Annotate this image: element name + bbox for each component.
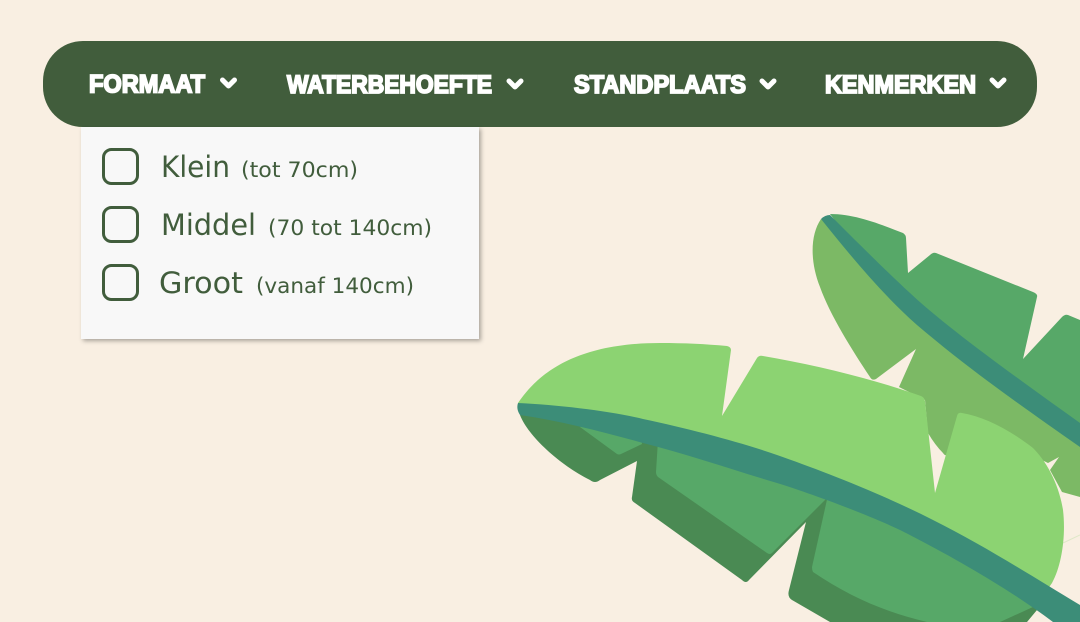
front leaf rib xyxy=(517,403,1080,622)
front leaf mid-green segment 3 xyxy=(812,495,1040,622)
faint stem line xyxy=(1063,535,1080,543)
menu item: Standplaats: STANDPLAATS xyxy=(574,71,746,99)
option: Klein: Klein xyxy=(161,150,230,184)
option: Middel: Middel xyxy=(161,208,256,242)
option: Klein xyxy=(104,150,358,184)
menu item: Waterbehoefte: WATERBEHOEFTE xyxy=(287,71,492,99)
front leaf shaded underside xyxy=(520,415,1037,622)
menu item: Kenmerken: KENMERKEN xyxy=(825,71,976,99)
option: Groot xyxy=(104,266,414,300)
front leaf upper blade xyxy=(518,343,1064,600)
chevron xyxy=(509,81,521,87)
front leaf mid-green segment 1 xyxy=(580,420,642,454)
illustration: front banana leaf xyxy=(517,343,1080,622)
rear leaf rib xyxy=(821,215,1080,447)
navigation bar xyxy=(43,41,1037,127)
rear leaf lower blade xyxy=(813,219,1080,497)
option: Middel: (70 tot 140cm) xyxy=(268,216,432,240)
menu item: Formaat: FORMAAT xyxy=(89,70,205,98)
front leaf mid-green segment 2 xyxy=(656,440,830,554)
option: Klein: (tot 70cm) xyxy=(241,158,358,182)
option: Groot: Groot xyxy=(159,266,243,300)
panel background xyxy=(81,127,479,339)
dropdown panel xyxy=(81,127,479,339)
nav background xyxy=(43,41,1037,127)
chevron xyxy=(222,80,234,86)
option: Groot: (vanaf 140cm) xyxy=(256,274,414,298)
rear leaf upper blade xyxy=(830,214,1080,435)
chevron xyxy=(762,81,774,87)
option: Middel xyxy=(104,208,432,242)
chevron xyxy=(992,80,1004,86)
illustration: rear banana leaf xyxy=(813,214,1080,543)
